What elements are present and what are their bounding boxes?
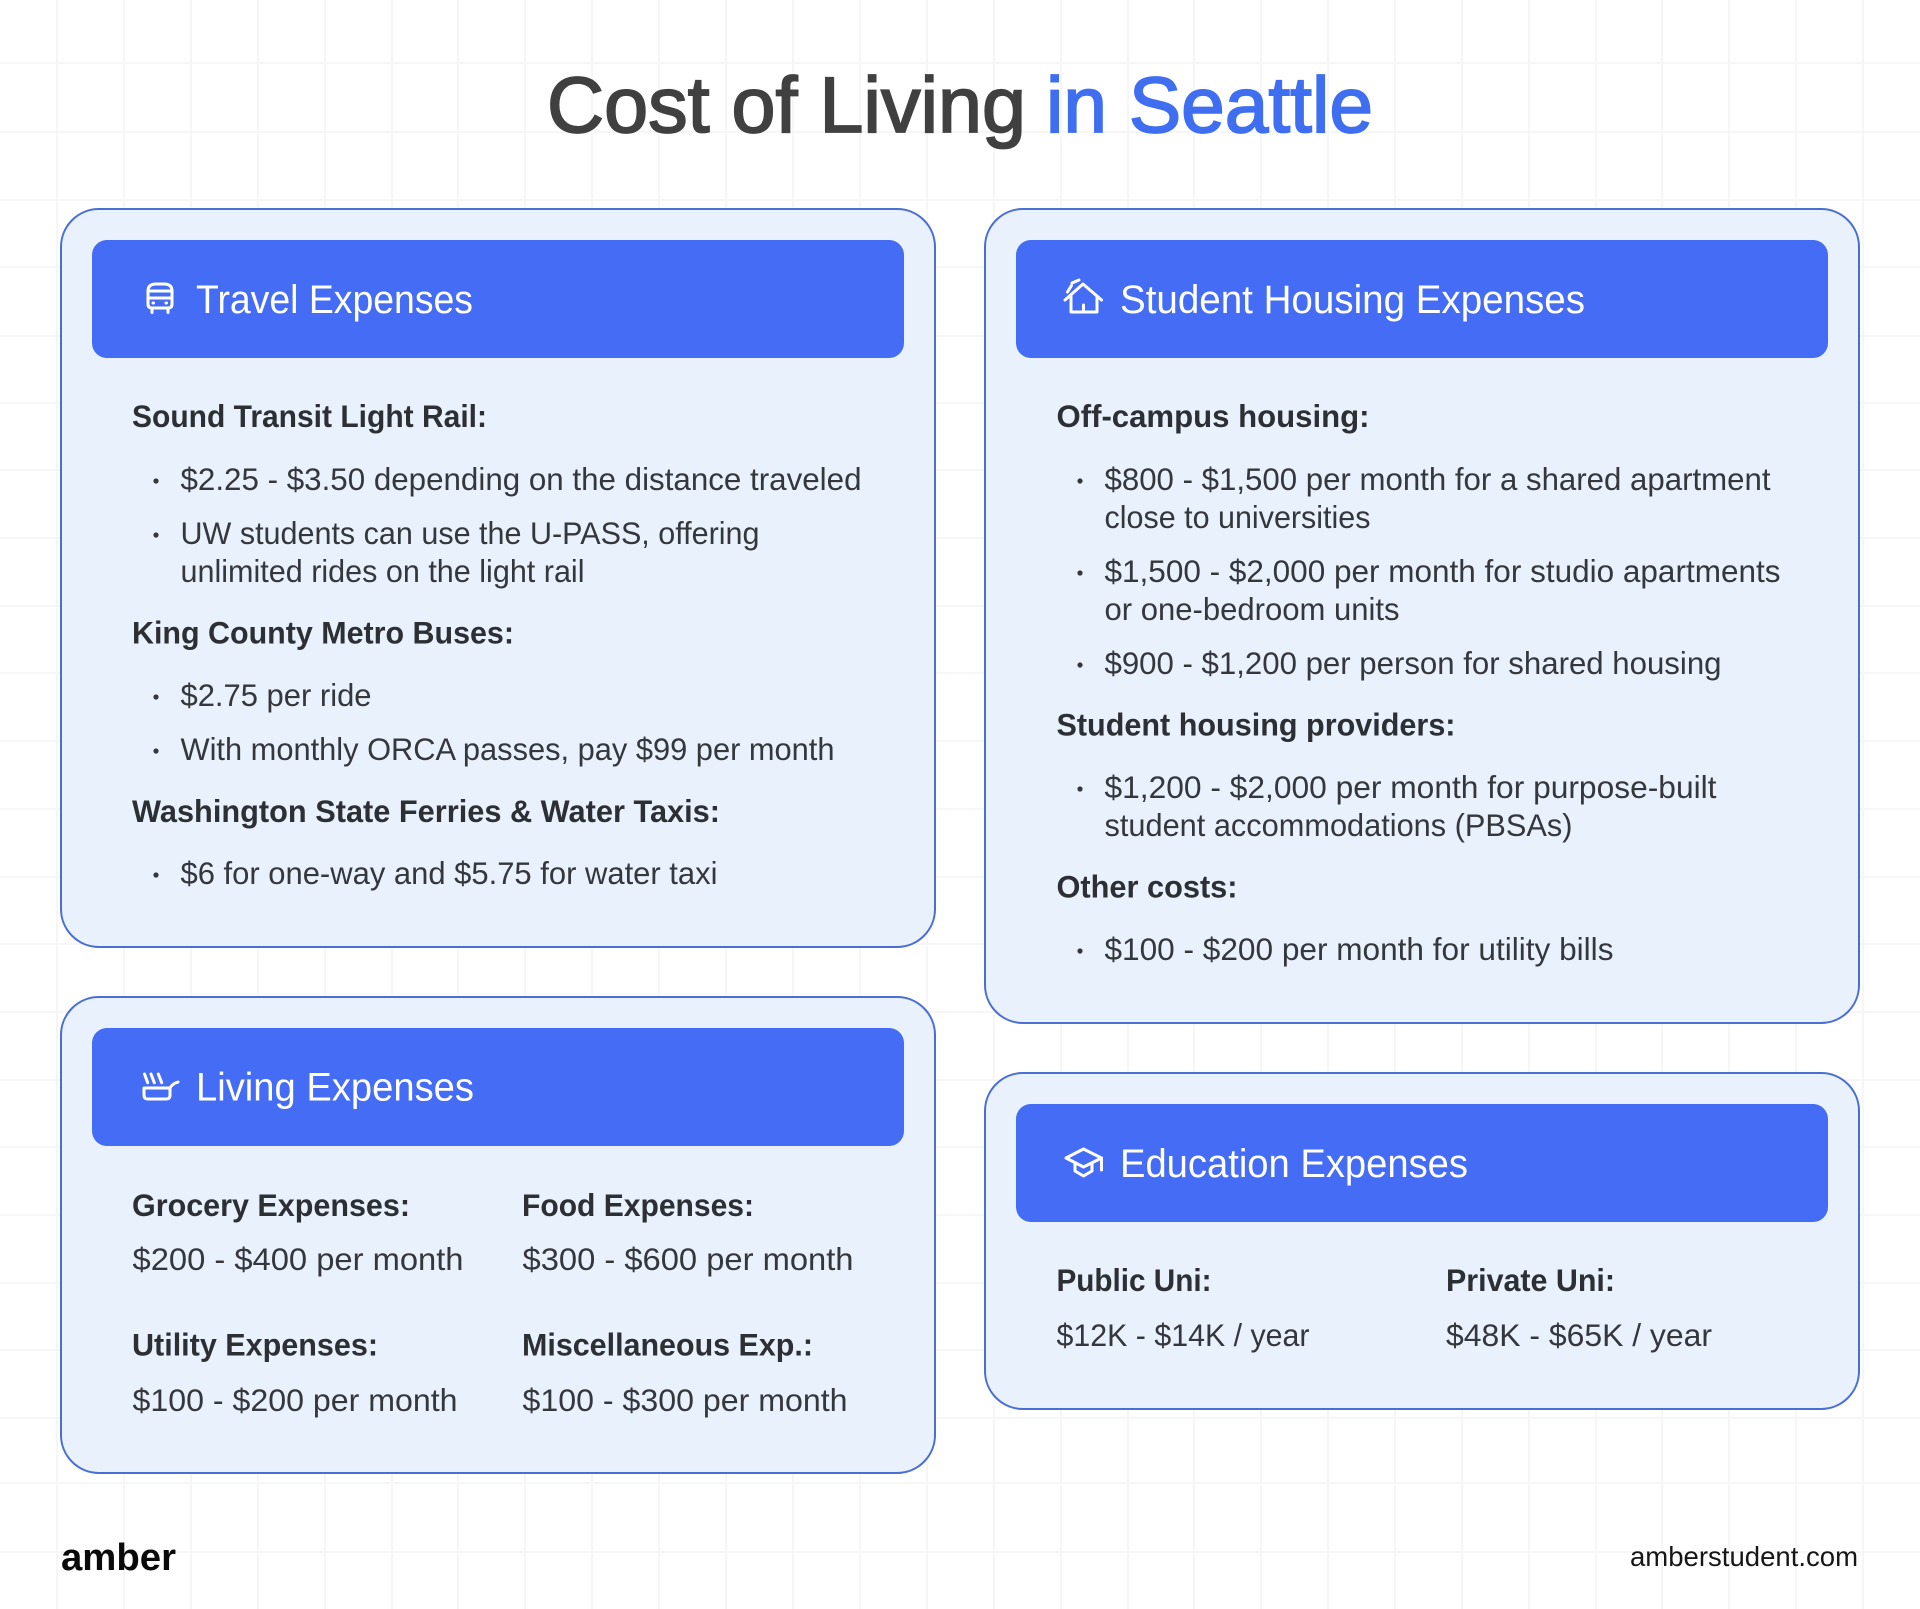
text block: living expense details: $100 - $300 per month [522,1382,848,1418]
text block: travel expense details: Sound Transit Light Rail: [132,398,487,434]
text block: housing expense details: $1,200 - $2,000 per month for purpose-built [1104,769,1717,805]
text block: living expense details: Food Expenses: [522,1187,754,1223]
panel: travel expenses [61,209,935,947]
text block: travel expense details: $6 for one-way and $5.75 for water taxi [180,855,718,891]
text block: education expense details [1056,1262,1712,1353]
text block: living expense details: $200 - $400 per month [132,1241,464,1277]
text block: education expense details: Public Uni: [1056,1262,1212,1298]
text block: living expense details: Utility Expenses: [132,1326,378,1362]
text block: travel expense details: With monthly ORCA passes, pay $99 per month [180,731,834,767]
text block: housing expense details: close to universities [1104,499,1370,535]
text block: travel expense details: Washington State Ferries & Water Taxis: [132,793,720,829]
text block: housing expense details: or one-bedroom units [1104,591,1400,627]
text block: housing expense details: $800 - $1,500 per month for a shared apartment [1104,461,1771,497]
text block: travel expense details: UW students can use the U-PASS, offering [180,515,760,551]
icon: bus [148,284,172,312]
text block: living expense details [132,1187,854,1418]
text block: housing expense details: Off-campus housing: [1056,398,1370,434]
text block: housing expense details: $1,500 - $2,000 per month for studio apartments [1104,553,1780,589]
header bar: living expenses: Living Expenses [196,1066,474,1110]
text block: travel expense details: King County Metro Buses: [132,614,514,650]
title [547,60,1373,149]
text block: living expense details: $300 - $600 per month [522,1241,854,1277]
text block: travel expense details [132,398,862,891]
icon: house [1065,280,1102,312]
text block: housing expense details: student accommodations (PBSAs) [1104,807,1572,843]
text block: housing expense details [1056,398,1780,967]
text block: travel expense details: $2.25 - $3.50 depending on the distance traveled [180,461,862,497]
text block: living expense details: Miscellaneous Exp.: [522,1326,813,1362]
header bar: education expenses [1016,1104,1828,1222]
header bar: student housing expenses: Student Housing Expenses [1120,278,1585,322]
header bar: education expenses: Education Expenses [1120,1142,1468,1186]
text block: living expense details: $100 - $200 per month [132,1382,458,1418]
header bar: living expenses [92,1028,904,1146]
text block: housing expense details: Student housing providers: [1056,706,1456,742]
text block: travel expense details: $2.75 per ride [180,677,372,713]
text block: housing expense details: $100 - $200 per month for utility bills [1104,931,1614,967]
text block: living expense details: Grocery Expenses: [132,1187,410,1223]
website url: amberstudent.com [1630,1541,1858,1572]
icon: graduation cap [1066,1149,1102,1176]
header bar: travel expenses: Travel Expenses [196,278,473,322]
header bar: student housing expenses [1016,240,1828,358]
icon: steaming pan [144,1074,178,1099]
text block: travel expense details: unlimited rides on the light rail [180,553,584,589]
panel: student housing expenses [985,209,1859,1023]
title: Cost of Living [547,60,1026,149]
panel: education expenses [985,1073,1859,1409]
title: in Seattle [1046,60,1373,149]
text block: education expense details: $48K - $65K / year [1446,1317,1712,1353]
text block: education expense details: $12K - $14K / year [1056,1317,1310,1353]
text block: housing expense details: Other costs: [1056,868,1238,904]
panel: living expenses [61,997,935,1473]
logo: amber: amber [61,1537,176,1579]
text block: education expense details: Private Uni: [1446,1262,1615,1298]
header bar: travel expenses [92,240,904,358]
text block: housing expense details: $900 - $1,200 per person for shared housing [1104,645,1722,681]
